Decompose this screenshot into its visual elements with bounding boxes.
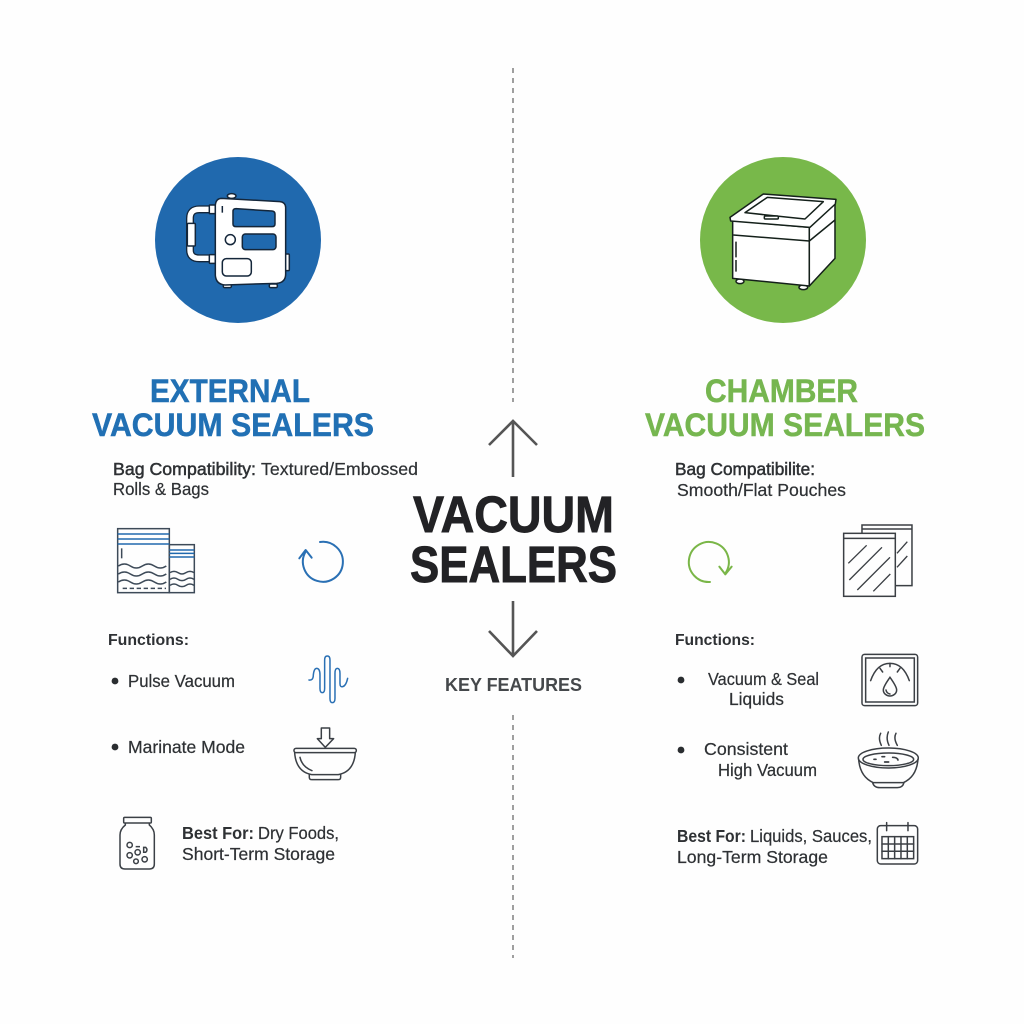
text: best for liquids: Long-Term Storage — [677, 847, 828, 867]
text: bag compatibility: Bag Compatibility: — [113, 459, 256, 479]
list item: consistent high vacuum — [678, 739, 817, 780]
text: bag compatibility: Smooth/Flat Pouches — [677, 480, 846, 500]
text: bag compatibility — [675, 459, 846, 500]
icon: external sealer badge — [155, 157, 321, 323]
heading: external vacuum sealers: EXTERNAL — [150, 373, 310, 409]
list item: consistent high vacuum: Consistent — [704, 739, 788, 759]
icon: pulse wave — [309, 656, 348, 703]
icon: flat pouches — [844, 525, 912, 596]
list item: vacuum and seal liquids: Vacuum & Seal — [708, 669, 819, 689]
label: key features: KEY FEATURES — [445, 674, 582, 695]
heading: chamber vacuum sealers: CHAMBER — [705, 373, 858, 409]
title: vacuum sealers: VACUUM — [413, 486, 614, 543]
arrow: up — [489, 421, 537, 477]
title: vacuum sealers — [410, 486, 617, 593]
list item: vacuum and seal liquids — [678, 669, 819, 709]
icon: blue cycle arrow — [299, 542, 343, 582]
list item: pulse vacuum: Pulse Vacuum — [128, 671, 235, 691]
text: bag compatibility: Textured/Embossed — [261, 459, 418, 479]
list item: marinate mode: Marinate Mode — [128, 737, 245, 757]
text: best for liquids: Liquids, Sauces, — [750, 826, 872, 846]
heading: external vacuum sealers — [92, 373, 374, 443]
text: bag compatibility — [113, 459, 418, 499]
heading: chamber vacuum sealers: VACUUM SEALERS — [645, 407, 925, 443]
icon: jar — [120, 817, 154, 869]
text: best for liquids — [677, 826, 872, 867]
heading: external vacuum sealers: VACUUM SEALERS — [92, 407, 374, 443]
icon: soup bowl — [858, 732, 918, 788]
panel: external vacuum sealers — [92, 157, 418, 869]
text: functions label: Functions: — [108, 632, 189, 649]
text: bag compatibility: Bag Compatibilite: — [675, 459, 815, 479]
icon: gauge with drop — [862, 654, 918, 706]
text: functions label: Functions: — [675, 632, 755, 649]
panel: central title — [410, 421, 617, 695]
icon: chamber sealer badge — [700, 157, 866, 323]
icon: green cycle arrow — [689, 542, 732, 582]
list item: consistent high vacuum: High Vacuum — [718, 760, 817, 780]
text: best for dry foods: Dry Foods, — [258, 823, 339, 843]
icon: marinate bowl — [294, 728, 356, 780]
text: bag compatibility: Rolls & Bags — [113, 479, 209, 499]
icon: textured bags — [118, 529, 194, 593]
arrow: down — [489, 601, 537, 656]
text: best for dry foods: Short-Term Storage — [182, 844, 335, 864]
panel: chamber vacuum sealers — [645, 157, 925, 867]
text: best for dry foods: Best For: — [182, 823, 254, 843]
list item: vacuum and seal liquids: Liquids — [729, 689, 784, 709]
title: vacuum sealers: SEALERS — [410, 536, 617, 593]
heading: chamber vacuum sealers — [645, 373, 925, 443]
text: best for dry foods — [182, 823, 339, 864]
text: best for liquids: Best For: — [677, 826, 746, 846]
icon: calendar — [877, 823, 918, 864]
